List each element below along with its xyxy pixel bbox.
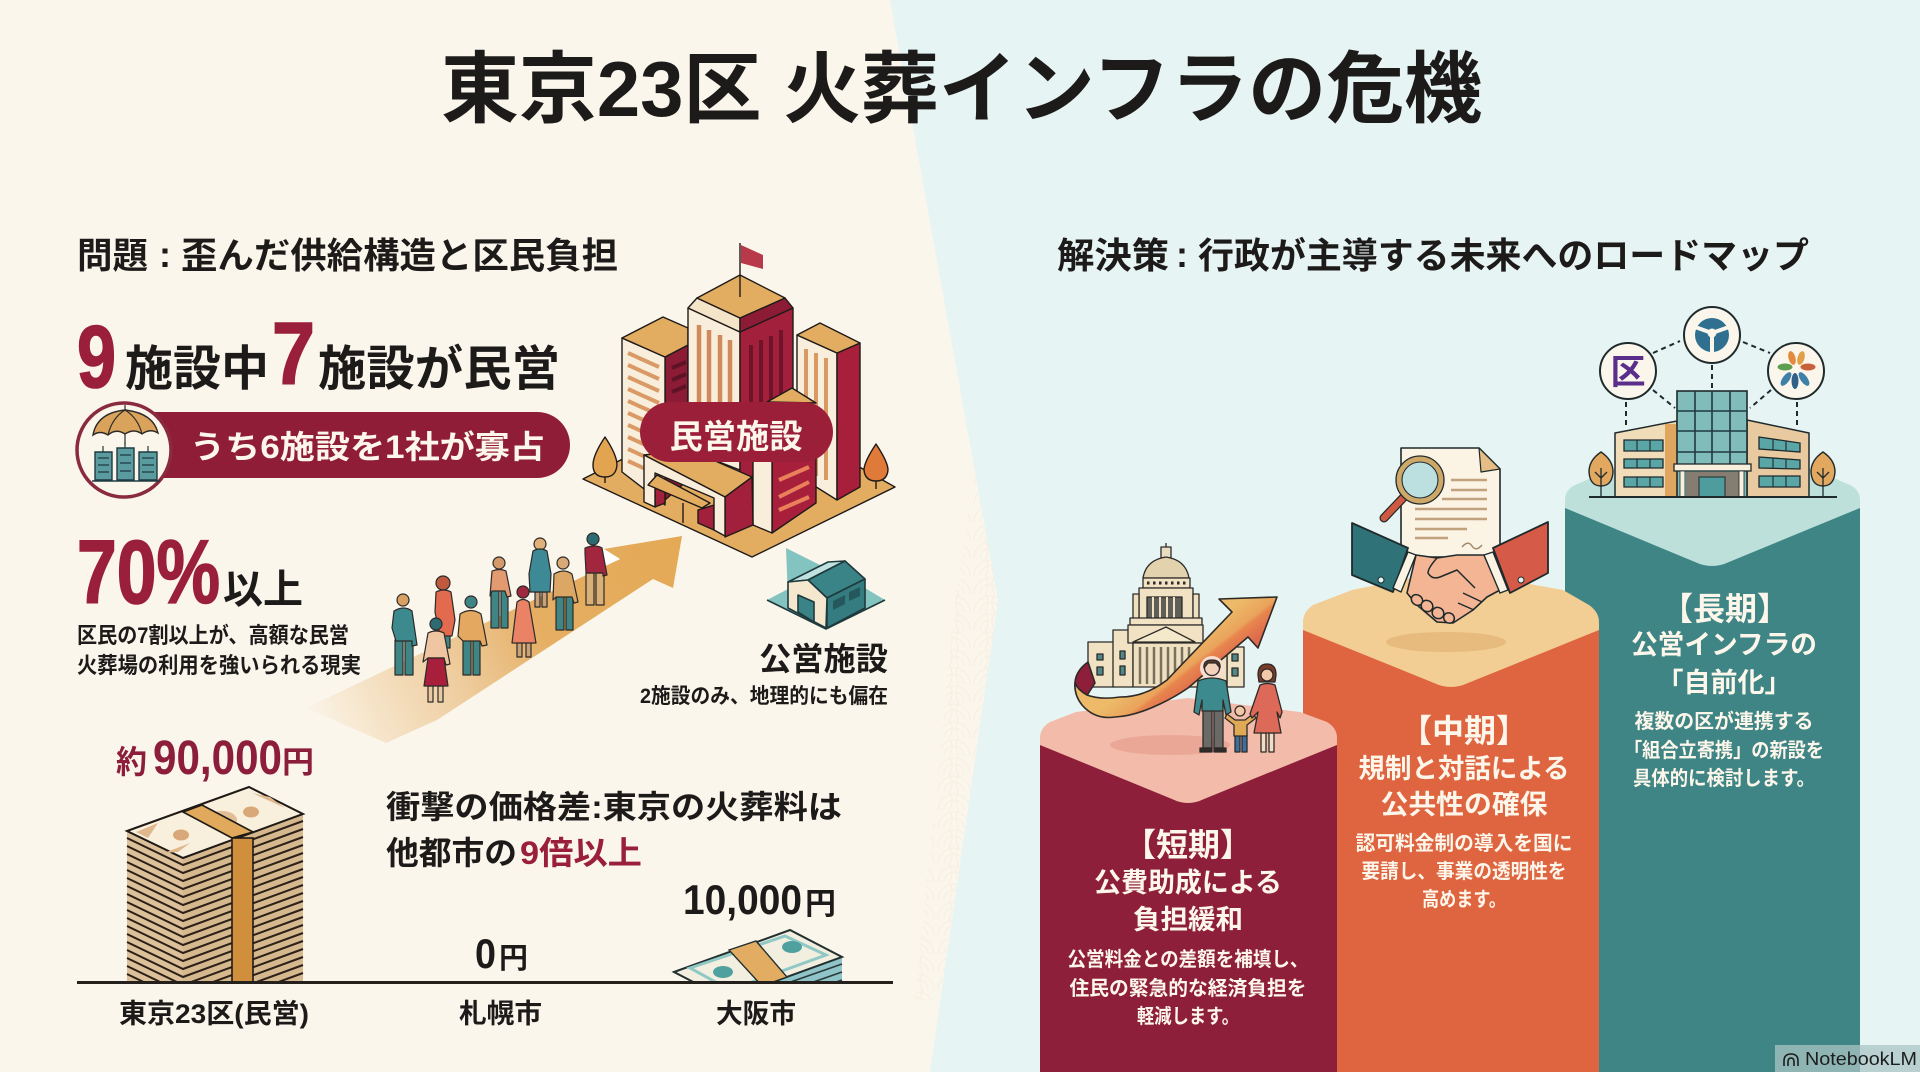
chart: price comparison (77, 732, 893, 1029)
arrow: residents pushed to private facilities (306, 536, 682, 743)
heading: problem: 問題 (77, 235, 148, 276)
person: woman in red skirt (423, 618, 450, 702)
heading: solution: 行政が主導する未来へのロードマップ (1198, 235, 1809, 276)
icon: public facility house (767, 548, 885, 629)
column: mid term (1303, 570, 1599, 1072)
person: man in tan top (553, 557, 578, 630)
woman (1250, 664, 1282, 752)
text: short term: 軽減します。 (1137, 1004, 1239, 1028)
heading: price gap: 9倍以上 (520, 835, 642, 871)
label: Tokyo price: 円 (282, 745, 314, 780)
axis labels: 東京23区(民営) (119, 999, 309, 1029)
arrow: rising curve (1075, 597, 1277, 718)
text: short term (1068, 827, 1308, 1028)
illustration: capitol building (1088, 543, 1244, 687)
background: left panel (0, 0, 998, 1072)
isometric base (583, 400, 895, 557)
illustration: private facility buildings (583, 243, 895, 557)
trees (593, 437, 888, 489)
text: long term: 「組合立寄携」の新設を (1624, 739, 1824, 762)
illustration: document and handshake (1352, 448, 1548, 625)
text: mid term: 規制と対話による (1358, 754, 1570, 784)
column: long term (1565, 450, 1860, 1072)
label: Osaka price: 円 (805, 888, 836, 921)
pill: monopoly callout (77, 403, 570, 497)
text: long term: 公営インフラの (1631, 630, 1817, 660)
text: short term: 公費助成による (1094, 868, 1282, 898)
axis labels: 札幌市 (459, 999, 542, 1029)
text: long term: 「自前化」 (1656, 668, 1792, 698)
text: mid term: 高めます。 (1422, 888, 1506, 911)
wings (1615, 421, 1677, 497)
text: 70% description: 区民の7割以上が、高額な民営 (77, 623, 349, 648)
watermark: NotebookLM (1805, 1049, 1917, 1069)
text: long term: 【長期】 (1661, 591, 1789, 627)
icon: ward emblem center (1684, 307, 1740, 363)
stat: 9 facilities 7 private: 施設が民営 (318, 343, 560, 396)
text: short term: 住民の緊急的な経済負担を (1070, 977, 1306, 1000)
stat: 70% or more: 以上 (223, 568, 303, 612)
icon: ward emblem left: 区 (1610, 353, 1646, 392)
title: 東京23区 火葬インフラの危機 (441, 45, 1482, 133)
right tower (797, 323, 860, 500)
left tower (622, 317, 688, 505)
trees (1589, 452, 1613, 486)
right cuff (1493, 522, 1548, 593)
icon: ward emblem right (1768, 343, 1824, 399)
icon: family (1194, 656, 1282, 752)
icon: ward emblem left (1600, 343, 1656, 399)
icon: tall money stack (124, 786, 306, 981)
people queue (392, 533, 607, 702)
text: public facility: 公営施設 (759, 641, 888, 677)
ground line (1589, 496, 1837, 498)
person: man in red top (585, 533, 607, 605)
magnifier (1384, 498, 1403, 518)
stat: 9 facilities 7 private: 7 (272, 304, 315, 403)
text: 70% description: 火葬場の利用を強いられる現実 (77, 653, 361, 678)
dashed connectors (1626, 341, 1797, 427)
label: Tokyo price: 90,000 (153, 732, 282, 785)
text: short term: 公営料金との差額を補填し、 (1068, 948, 1308, 971)
text: short term: 負担緩和 (1133, 905, 1243, 935)
stat: 9 facilities 7 private: 9 (77, 307, 116, 406)
label: Sapporo price: 0 (475, 930, 496, 977)
illustration: wards cooperation building (1589, 307, 1837, 498)
center tower (688, 275, 793, 490)
text: mid term: 認可料金制の導入を国に (1356, 831, 1572, 855)
person: woman in orange top (490, 557, 511, 628)
text: long term: 複数の区が連携する (1634, 709, 1814, 733)
text: 70% description (77, 623, 361, 678)
heading: solution: 解決策 (1057, 235, 1169, 276)
watermark (1775, 1045, 1920, 1072)
label: Osaka price: 10,000 (683, 876, 802, 923)
heading: solution: : (1176, 234, 1188, 275)
column: short term (1040, 698, 1337, 1072)
heading: problem: : (159, 234, 171, 275)
label: Sapporo price (475, 930, 528, 977)
stat: 70% or more: 70% (77, 523, 220, 623)
label pill: 民営施設 (670, 418, 802, 455)
label: Tokyo price: 約 (116, 744, 147, 780)
person: man in tan sweater (458, 596, 487, 675)
text: mid term: 【中期】 (1400, 713, 1528, 749)
heading: problem: 歪んだ供給構造と区民負担 (181, 235, 618, 276)
person: man in teal sweater (392, 594, 417, 675)
front right tower (753, 388, 816, 533)
stat: 9 facilities 7 private (77, 304, 560, 406)
text: public facility: 2施設のみ、地理的にも偏在 (640, 685, 888, 708)
heading: price gap: 衝撃の価格差:東京の火葬料は (386, 789, 842, 825)
left cuff (1352, 523, 1408, 592)
text: mid term: 要請し、事業の透明性を (1362, 860, 1566, 883)
text: short term: 【短期】 (1124, 827, 1252, 863)
person: woman in teal coat (529, 538, 551, 607)
axis labels: 大阪市 (716, 999, 796, 1029)
icon: umbrella over three buildings (77, 403, 171, 497)
icon: small money stack (672, 928, 844, 981)
text: long term: 具体的に検討します。 (1633, 767, 1815, 790)
label: Sapporo price: 円 (499, 943, 528, 975)
axis line (77, 981, 893, 984)
hands (1407, 555, 1500, 623)
text: mid term: 公共性の確保 (1380, 790, 1548, 820)
low gate building (644, 450, 753, 537)
person: woman in coral dress (512, 586, 536, 657)
pill: monopoly callout: うち6施設を1社が寡占 (190, 429, 545, 465)
text: mid term (1356, 713, 1572, 911)
man (1194, 656, 1231, 752)
child (1225, 706, 1256, 752)
heading: price gap (386, 789, 842, 871)
text: public facility (640, 641, 888, 708)
text: long term (1624, 591, 1824, 790)
heading: price gap: 他都市の (386, 835, 517, 871)
flag (740, 243, 763, 297)
stat: 9 facilities 7 private: 施設中 (125, 343, 269, 396)
person: woman in orange-red dress (435, 576, 455, 648)
axis labels (119, 999, 796, 1029)
glass tower (1677, 391, 1747, 497)
document (1401, 448, 1500, 557)
label pill (640, 402, 833, 462)
